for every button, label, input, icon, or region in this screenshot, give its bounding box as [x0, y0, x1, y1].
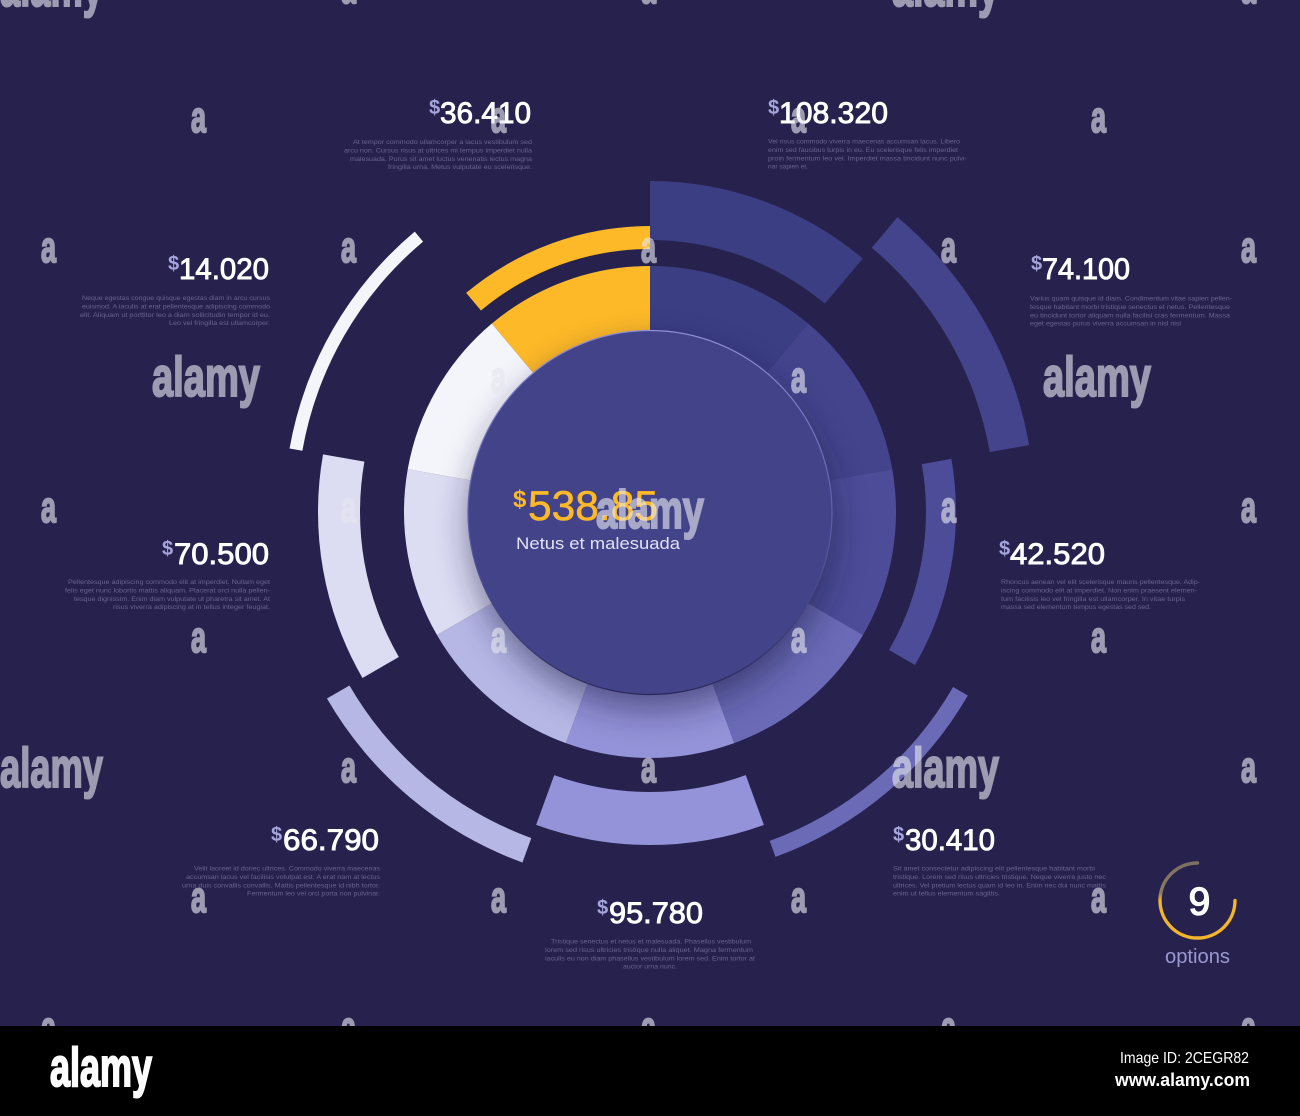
label: 66.790: $ — [271, 824, 282, 846]
label: 36.410: $ — [429, 97, 440, 119]
watermark pattern: a — [341, 483, 356, 532]
arc: 108.320 — [650, 181, 863, 304]
watermark pattern: a — [941, 223, 956, 272]
total dollar sign: $ — [513, 486, 527, 513]
label: 70.500 — [65, 538, 270, 611]
label: 70.500: $ — [162, 538, 173, 560]
label: 42.520: $ — [999, 538, 1010, 560]
watermark pattern: a — [41, 483, 56, 532]
watermark pattern: a — [341, 743, 356, 792]
watermark pattern: a — [1091, 613, 1106, 662]
options caption: options — [1165, 946, 1230, 968]
segment: 70.500 — [404, 469, 494, 635]
description: 95.780: auctor urna nunc. — [623, 964, 677, 971]
label: 42.520: 42.520 — [1010, 538, 1105, 571]
description: 42.520: tum facilisis leo vel fringilla est ullamcorper. In vitae turpis — [1001, 596, 1186, 603]
segment: 30.410 — [712, 602, 863, 743]
description: 74.100 — [1030, 296, 1232, 328]
arc: 66.790 — [327, 686, 531, 862]
description: 36.410 — [344, 139, 532, 171]
segment: 42.520 — [806, 469, 896, 635]
label: 66.790 — [182, 824, 381, 898]
label: 95.780: 95.780 — [609, 897, 703, 930]
description: 14.020: elit. Aliquam ut porttitor leo a diam sollicitudin tempor id eu. — [80, 312, 270, 319]
watermark pattern: a — [191, 613, 206, 662]
description: 95.780 — [545, 938, 755, 971]
option count: 9 — [1189, 880, 1210, 924]
label: 108.320: $ — [768, 97, 779, 119]
label: 14.020: 14.020 — [179, 253, 269, 286]
arc: 95.780 — [536, 775, 764, 845]
central circle — [468, 330, 832, 694]
footer url: www.alamy.com — [1114, 1070, 1250, 1090]
description: 70.500: risus viverra adipiscing at in tellus integer feugiat. — [113, 604, 270, 611]
description: 36.410: At tempor commodo ullamcorper a lacus vestibulum sed — [353, 139, 532, 146]
description: 108.320: proin fermentum leo vel. Imperdiet massa tincidunt nunc pulvi- — [768, 155, 967, 162]
arc: 36.410 — [466, 226, 650, 311]
label: 74.100: $ — [1031, 253, 1042, 275]
label: 30.410: 30.410 — [905, 824, 995, 857]
footer logo: alamy — [50, 1036, 152, 1098]
description: 14.020: Leo vel fringilla est ullamcorper. — [169, 320, 270, 327]
watermark pattern: a — [641, 1003, 656, 1052]
watermark pattern: a — [341, 1003, 356, 1052]
description: 108.320 — [768, 138, 967, 171]
description: 14.020: euismod. A iaculis at erat pellentesque adipiscing commodo — [82, 303, 270, 310]
arc: 42.520 — [889, 459, 956, 665]
segment: 36.410 — [492, 266, 650, 374]
description: 70.500: felis eget nunc lobortis mattis aliquam. Placerat orci nulla pellen- — [65, 587, 270, 594]
watermark pattern: a — [791, 873, 806, 922]
description: 36.410: arcu non. Cursus risus at ultrices mi tempus imperdiet nulla — [344, 147, 532, 154]
label: 30.410: $ — [893, 824, 904, 846]
watermark pattern: alamy — [152, 345, 260, 408]
description: 14.020: Neque egestas congue quisque egestas diam in arcu cursus — [82, 295, 271, 302]
label: 108.320: 108.320 — [779, 97, 888, 130]
label: 42.520 — [999, 538, 1200, 611]
description: 66.790: urna duis convallis convallis. Mattis pellentesque id nibh tortor. — [182, 882, 380, 889]
description: 36.410: malesuada. Purus sit amet luctus venenatis lectus magna — [350, 156, 532, 163]
label: 30.410 — [893, 824, 1107, 898]
watermark pattern: a — [191, 93, 206, 142]
watermark pattern: a — [941, 483, 956, 532]
description: 66.790: Fermentum leo vel orci porta non pulvinar. — [247, 891, 380, 898]
label: 36.410 — [344, 97, 532, 171]
description: 95.780: Tristique senectus et netus et malesuada. Phasellus vestibulum — [551, 938, 752, 946]
description: 30.410: Sit amet consectetur adipiscing elit pellentesque habitant morbi — [893, 866, 1096, 872]
description: 108.320: nar sapien et. — [768, 164, 808, 171]
label: 66.790: 66.790 — [283, 824, 379, 857]
description: 30.410: tristique. Lorem sed risus ultricies tristique. Neque viverra justo nec — [893, 874, 1107, 881]
description: 95.780: iaculis eu non diam phasellus vestibulum lorem sed. Enim tortor at — [545, 955, 755, 962]
outer arcs: one band per option — [290, 181, 1029, 862]
watermark pattern: a — [491, 613, 506, 662]
watermark pattern: alamy — [596, 480, 704, 540]
watermark pattern: a — [641, 743, 656, 792]
label: 14.020: $ — [168, 253, 179, 275]
watermark pattern: a — [191, 873, 206, 922]
arc: 14.020 — [290, 232, 423, 451]
label: 95.780 — [545, 897, 755, 971]
description: 108.320: Vel risus commodo viverra maecenas accumsan lacus. Libero — [768, 138, 960, 146]
description: 66.790: accumsan lacus vel facilisis volutpat est. A erat nam at lectus — [186, 874, 381, 881]
description: 74.100: eget egestas purus viverra accumsan in nisl nisi — [1030, 321, 1182, 328]
description: 30.410: enim ut tellus elementum sagittis. — [893, 891, 1000, 898]
watermark pattern: a — [341, 223, 356, 272]
description: 74.100: eu tincidunt tortor aliquam nulla facilisi cras fermentum. Massa — [1030, 312, 1230, 319]
description: 70.500: tesque dignissim. Enim diam vulputate ut pharetra sit amet. At — [74, 596, 270, 603]
arc: 30.410 — [770, 687, 968, 857]
segment: 95.780 — [566, 681, 734, 758]
watermark pattern: alamy — [892, 736, 999, 799]
description: 30.410: ultrices. Vel pretium lectus quam id leo in. Enim nec dui nunc mattis — [893, 882, 1107, 889]
image id: Image ID: 2CEGR82 — [1120, 1050, 1249, 1067]
description: 66.790: Velit laoreet id donec ultrices. Commodo viverra maecenas — [194, 866, 381, 872]
watermark pattern: a — [1241, 483, 1256, 532]
watermark pattern: a — [641, 223, 656, 272]
description: 70.500: Pellentesque adipiscing commodo elit at imperdiet. Nullam eget — [68, 579, 270, 586]
segment: 74.100 — [766, 324, 892, 481]
arc: 74.100 — [872, 217, 1029, 452]
central total — [513, 482, 681, 553]
watermark pattern: a — [491, 873, 506, 922]
description: 74.100: tesque habitant morbi tristique senectus et netus. Pellentesque — [1030, 304, 1230, 311]
label: 36.410: 36.410 — [440, 97, 531, 130]
watermark pattern: a — [1241, 743, 1256, 792]
label: 108.320 — [768, 97, 967, 171]
description: 95.780: lorem sed risus ultricies tristique nulla aliquet. Magna fermentum — [545, 947, 754, 954]
label: 95.780: $ — [597, 897, 608, 919]
watermark pattern: a — [491, 353, 506, 402]
description: 30.410 — [893, 866, 1107, 898]
watermark pattern: a — [41, 1003, 56, 1052]
segment: 14.020 — [408, 324, 534, 481]
total value: 538.85 — [528, 482, 658, 529]
label: 74.100: 74.100 — [1042, 253, 1130, 286]
description: 14.020 — [80, 295, 271, 327]
description: 42.520: massa sed elementum tempus egestas sed sed. — [1001, 604, 1151, 611]
arc: 70.500 — [318, 454, 399, 678]
inner donut ring segments — [404, 266, 896, 758]
description: 36.410: fringilla urna. Metus vulputate eu scelerisque. — [388, 164, 532, 171]
segment: 108.320 — [650, 266, 808, 374]
watermark pattern: a — [1091, 93, 1106, 142]
label: 74.100 — [1030, 253, 1232, 328]
description: 74.100: Varius quam quisque id diam. Condimentum vitae sapien pellen- — [1030, 296, 1232, 302]
watermark pattern: a — [791, 353, 806, 402]
description: 42.520: iscing commodo elit at imperdiet. Non enim praesent elemen- — [1001, 587, 1197, 594]
footer bar — [0, 1026, 1300, 1116]
icon: progress ring — [1160, 863, 1235, 938]
watermark pattern: a — [941, 1003, 956, 1052]
watermark pattern: a — [1241, 1003, 1256, 1052]
watermark pattern: a — [1091, 873, 1106, 922]
description: 66.790 — [182, 866, 381, 898]
total caption: Netus et malesuada — [516, 534, 681, 553]
label: 14.020 — [80, 253, 271, 327]
watermark pattern: a — [791, 93, 806, 142]
options counter — [1160, 863, 1235, 968]
watermark pattern: alamy — [1043, 345, 1151, 408]
watermark pattern: a — [791, 613, 806, 662]
segment: 66.790 — [437, 602, 588, 743]
watermark pattern: alamy — [0, 736, 103, 799]
central circle shadow — [470, 346, 834, 710]
description: 108.320: enim sed faucibus turpis in eu. Eu scelerisque felis imperdiet — [768, 147, 958, 154]
watermark pattern: a — [491, 93, 506, 142]
description: 42.520 — [1001, 579, 1200, 611]
description: 42.520: Rhoncus aenean vel elit scelerisque mauris pellentesque. Adip- — [1001, 579, 1200, 586]
label: 70.500: 70.500 — [174, 538, 269, 571]
watermark pattern: a — [1241, 223, 1256, 272]
description: 70.500 — [65, 579, 270, 611]
watermark pattern: a — [41, 223, 56, 272]
